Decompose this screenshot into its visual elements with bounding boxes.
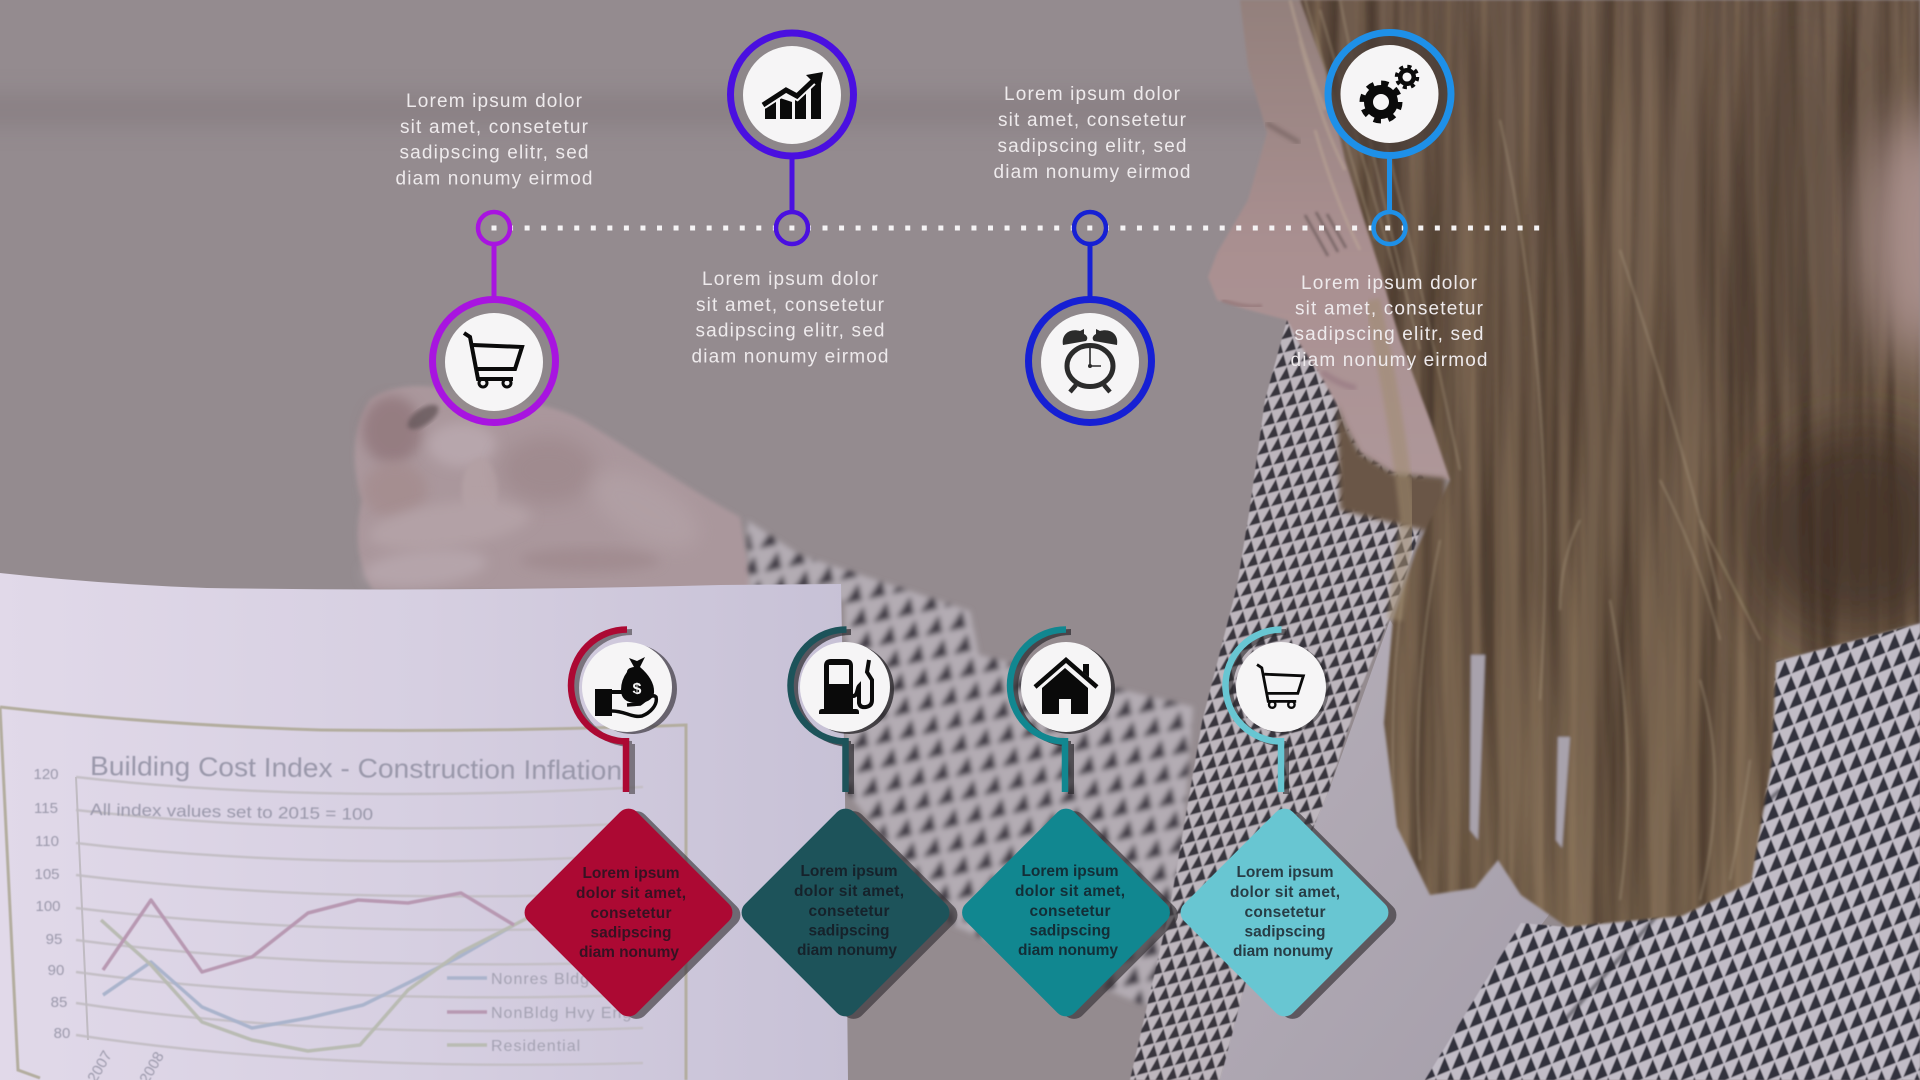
diamond 4 shadow	[1184, 806, 1401, 1024]
photo: stray pale hair over temple	[1290, 0, 1360, 250]
text block 2: sadipscing elitr, sed	[696, 320, 884, 342]
photo: right jacket	[1425, 623, 1920, 1080]
icon disc 1	[582, 642, 677, 734]
diamond 3 text: Lorem ipsum	[1022, 863, 1118, 880]
icon disc 4	[1340, 45, 1438, 143]
connector 1	[492, 246, 496, 297]
text block 4: sit amet, consetetur	[1295, 298, 1484, 320]
connector 3	[1088, 246, 1092, 297]
diamond 4 text	[1230, 864, 1340, 960]
timeline item 4: gears	[1290, 32, 1488, 371]
text block 1: Lorem ipsum dolor	[406, 91, 583, 112]
photo: hand	[355, 386, 752, 592]
diamond 3 text: sadipscing	[1030, 922, 1110, 940]
icon disc 2	[743, 46, 841, 144]
chart legend: Residential	[491, 1038, 581, 1055]
text block 1: sit amet, consetetur	[400, 117, 589, 138]
column 2: dark teal card	[737, 630, 962, 1024]
diamond 3 text: dolor sit amet,	[1015, 883, 1125, 900]
text block 4: diam nonumy eirmod	[1290, 350, 1488, 371]
diamond 3 text: diam nonumy	[1018, 942, 1118, 959]
arc and stem shadow 1	[576, 632, 632, 794]
photo: pale hair strand past the chin	[1372, 300, 1408, 620]
text block 4: sadipscing elitr, sed	[1294, 324, 1484, 345]
text block 4: Lorem ipsum dolor	[1301, 273, 1478, 294]
timeline item 1: cart	[396, 91, 592, 422]
diamond 2 text: diam nonumy	[797, 942, 897, 959]
chart axis labels: 80	[54, 1025, 70, 1042]
diamond 4	[1176, 804, 1393, 1021]
icon: shopping cart	[464, 333, 522, 387]
chart axis labels: 110	[35, 833, 59, 850]
arc and stem 3	[1010, 630, 1066, 792]
chart data lines	[101, 893, 537, 1051]
diamond 4 text: dolor sit amet,	[1230, 884, 1340, 901]
chart axis labels: 100	[35, 898, 61, 915]
text block 3: Lorem ipsum dolor	[1004, 84, 1181, 105]
chart subtitle: All index values set to 2015 = 100	[90, 801, 373, 824]
icon: gears	[1362, 66, 1418, 121]
icon: money bag on hand: $	[633, 681, 642, 698]
icon: fuel pump	[819, 659, 872, 714]
icon: growth chart	[763, 72, 823, 119]
text block 3	[994, 84, 1190, 183]
diamond 1 text: Lorem ipsum	[582, 865, 680, 882]
diamond 4 text: diam nonumy	[1233, 943, 1333, 960]
photo: paper with chart	[0, 573, 848, 1080]
text block 1	[396, 91, 592, 190]
icon: small shopping cart	[1257, 665, 1303, 708]
text block 4	[1290, 273, 1488, 371]
diamond 4 text: consetetur	[1244, 904, 1326, 921]
chart legend	[447, 971, 632, 1055]
chart axis labels: 115	[34, 800, 58, 817]
text block 1: diam nonumy eirmod	[396, 168, 592, 190]
ring 4	[1328, 32, 1451, 156]
arc and stem shadow 3	[1015, 632, 1071, 794]
chart legend: Nonres Bldg	[491, 971, 590, 988]
icon disc 4	[1236, 642, 1329, 734]
text block 3: sit amet, consetetur	[998, 110, 1187, 131]
diamond 1 text: sadipscing	[590, 924, 672, 942]
photo: face	[1208, 0, 1480, 480]
photo: collar	[1130, 320, 1430, 1080]
diamond 3 text: consetetur	[1030, 903, 1110, 920]
photo: hair	[1300, 0, 1920, 928]
arc and stem 4	[1226, 630, 1282, 792]
text block 2: diam nonumy eirmod	[692, 346, 888, 368]
icon disc 3	[1041, 313, 1139, 411]
photo: under-chin hair	[1337, 405, 1445, 535]
diamond 1	[520, 804, 737, 1021]
timeline item 2: growth	[692, 33, 888, 368]
dotted timeline	[492, 226, 1544, 230]
ring 3	[1028, 300, 1152, 422]
connector 4	[1387, 157, 1392, 211]
chart axis labels: 85	[51, 994, 67, 1011]
diamond 1 shadow	[528, 806, 745, 1024]
diamond 1 text: diam nonumy	[579, 944, 679, 961]
node 4	[1374, 212, 1406, 244]
diamond 2 text: sadipscing	[808, 922, 890, 940]
diamond 1 text	[576, 865, 686, 961]
text block 2: sit amet, consetetur	[696, 295, 885, 316]
connector 2	[790, 159, 794, 211]
icon: alarm clock	[1063, 329, 1117, 392]
node 2	[776, 212, 808, 244]
photo: shirt	[1220, 620, 1560, 1080]
text block 1: sadipscing elitr, sed	[400, 142, 588, 164]
icon disc 3	[1021, 642, 1115, 734]
diamond 1 text: consetetur	[590, 905, 672, 922]
diamond 2 shadow	[745, 806, 962, 1024]
diamond 3	[957, 804, 1175, 1021]
chart grid lines	[76, 777, 643, 1065]
icon: money bag on hand	[595, 657, 656, 716]
icon disc 1	[445, 313, 543, 411]
column 4: light teal card	[1176, 630, 1401, 1024]
arc and stem 1	[571, 630, 627, 792]
chart title: Building Cost Index - Construction Inflation	[90, 751, 622, 786]
ring 1	[432, 300, 556, 422]
diamond 4 text: Lorem ipsum	[1236, 864, 1334, 881]
node 1	[478, 212, 510, 244]
chart legend: NonBldg Hvy Eng	[491, 1005, 632, 1022]
chart frame	[0, 707, 686, 1080]
diamond 2 text: dolor sit amet,	[794, 883, 904, 900]
arc and stem shadow 4	[1230, 632, 1286, 794]
diamond 2 text: consetetur	[808, 903, 890, 920]
diamond 1 text: dolor sit amet,	[576, 885, 686, 902]
diamond 3 shadow	[965, 806, 1183, 1024]
icon: house	[1035, 660, 1097, 714]
diamond 3 text	[1015, 863, 1125, 959]
timeline item 3: clock	[994, 84, 1190, 422]
diamond 2 text	[794, 863, 904, 959]
column 3: teal card	[957, 630, 1183, 1024]
text block 2: Lorem ipsum dolor	[702, 269, 879, 290]
chart axis labels: 90	[48, 962, 64, 979]
text block 2	[692, 269, 888, 368]
ring 2	[730, 33, 854, 156]
diamond 4 text: sadipscing	[1244, 924, 1326, 940]
chart axis labels: 105	[34, 866, 60, 883]
node 3	[1074, 212, 1106, 244]
diamond 2	[737, 804, 954, 1021]
text block 3: diam nonumy eirmod	[994, 162, 1190, 183]
chart axis labels	[33, 766, 168, 1080]
text block 3: sadipscing elitr, sed	[998, 136, 1186, 157]
chart axis labels: 120	[33, 766, 59, 783]
chart axis labels: 95	[46, 931, 62, 948]
arc and stem shadow 2	[795, 632, 851, 794]
icon disc 2	[800, 642, 894, 734]
diamond 2 text: Lorem ipsum	[800, 863, 898, 880]
arc and stem 2	[790, 630, 846, 792]
column 1: crimson card	[520, 630, 745, 1024]
photo: blurred sleeve	[747, 520, 1193, 1010]
